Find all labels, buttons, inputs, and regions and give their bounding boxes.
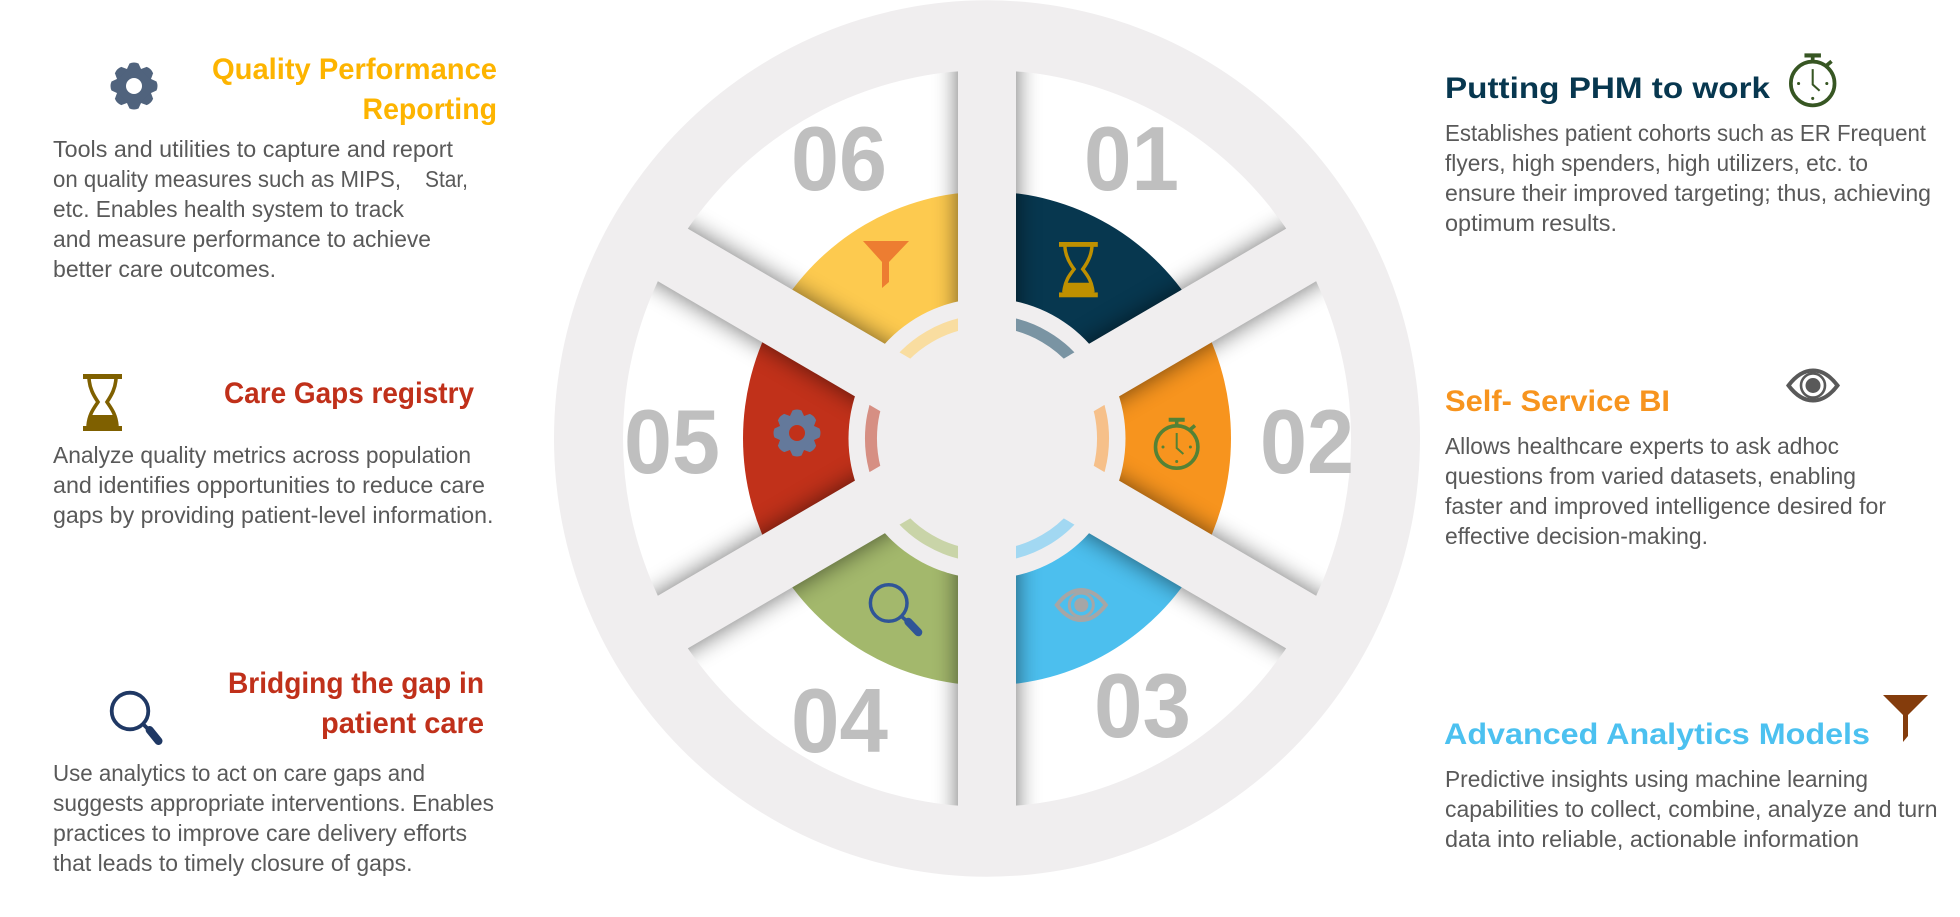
body text: and measure performance to achieve — [53, 226, 431, 252]
body text — [53, 136, 468, 282]
number 01: 01 — [1084, 109, 1179, 210]
panel: putting PHM to work — [1445, 55, 1931, 236]
wheel graphic — [554, 0, 1420, 877]
segment 05 colour band — [743, 315, 987, 562]
number 05: 05 — [624, 392, 720, 493]
body text: optimum results. — [1445, 210, 1617, 236]
body text: on quality measures such as MIPS, — [53, 166, 401, 192]
body text: etc. Enables health system to track — [53, 196, 404, 222]
body text: better care outcomes. — [53, 256, 276, 282]
body text — [1445, 433, 1886, 549]
panel: self-service BI — [1445, 370, 1886, 549]
body text: Allows healthcare experts to ask adhoc — [1445, 433, 1839, 459]
icon: magnifier — [112, 693, 158, 741]
body text — [1445, 766, 1938, 852]
spoke shadows — [651, 71, 1323, 806]
spokes — [626, 34, 1348, 843]
segment 02 colour band — [987, 315, 1231, 562]
body text: practices to improve care delivery efforts — [53, 820, 467, 846]
icon: wheel funnel — [863, 241, 909, 288]
body text: Star, — [425, 166, 468, 192]
heading: Self- Service BI — [1445, 385, 1670, 418]
white inner disc — [623, 70, 1351, 807]
body text: ensure their improved targeting; thus, achieving — [1445, 180, 1931, 206]
icon: wheel eye — [1057, 590, 1106, 620]
body text — [53, 760, 494, 876]
panel: quality performance reporting — [53, 53, 497, 282]
body text: that leads to timely closure of gaps. — [53, 850, 412, 876]
icon: wheel hourglass — [1059, 242, 1098, 297]
heading: Bridging the gap in — [228, 667, 484, 700]
heading: Care Gaps registry — [224, 377, 474, 410]
segment 06 colour band — [776, 192, 987, 438]
centre disc — [848, 298, 1126, 579]
body text: Analyze quality metrics across population — [53, 442, 471, 468]
icon: hourglass — [83, 374, 122, 431]
body text: suggests appropriate interventions. Enables — [53, 790, 494, 816]
icon: gear — [110, 62, 158, 110]
heading: Reporting — [362, 93, 497, 126]
heading: patient care — [321, 707, 484, 740]
icon: wheel magnifier — [870, 585, 918, 632]
number 06: 06 — [791, 109, 887, 210]
icon: wheel gear — [774, 410, 820, 456]
body text: Use analytics to act on care gaps and — [53, 760, 425, 786]
segment 01 colour band — [987, 192, 1198, 438]
body text: Establishes patient cohorts such as ER Frequent — [1445, 120, 1926, 146]
body text — [1445, 120, 1931, 236]
body text: effective decision-making. — [1445, 523, 1708, 549]
body text: capabilities to collect, combine, analyze and turn — [1445, 796, 1938, 822]
heading — [212, 53, 497, 126]
icon: funnel — [1883, 695, 1928, 742]
heading: Quality Performance — [212, 53, 497, 86]
panel: bridging the gap in patient care — [53, 667, 494, 876]
number 02: 02 — [1260, 392, 1354, 493]
body text: Tools and utilities to capture and report — [53, 136, 453, 162]
number 03: 03 — [1094, 656, 1191, 757]
body text: Predictive insights using machine learning — [1445, 766, 1868, 792]
body text: data into reliable, actionable information — [1445, 826, 1859, 852]
body text: and identifies opportunities to reduce care — [53, 472, 485, 498]
body text: questions from varied datasets, enabling — [1445, 463, 1856, 489]
segment 03 colour band — [987, 438, 1198, 685]
body text: faster and improved intelligence desired for — [1445, 493, 1886, 519]
body text: flyers, high spenders, high utilizers, etc. to — [1445, 150, 1868, 176]
panel: advanced analytics models — [1444, 695, 1938, 852]
number 04: 04 — [791, 671, 888, 772]
panel: care gaps registry — [53, 374, 494, 528]
thin inner arcs — [871, 321, 1103, 556]
outer ring — [554, 0, 1420, 877]
heading: Putting PHM to work — [1445, 72, 1770, 105]
heading — [228, 667, 484, 740]
icon: stopwatch — [1791, 55, 1835, 105]
icon: eye — [1788, 370, 1838, 400]
wheel — [554, 0, 1420, 877]
segment 04 colour band — [776, 438, 987, 685]
body text: gaps by providing patient-level information. — [53, 502, 494, 528]
icon: wheel stopwatch — [1156, 420, 1198, 468]
heading: Advanced Analytics Models — [1444, 718, 1870, 751]
body text — [53, 442, 494, 528]
